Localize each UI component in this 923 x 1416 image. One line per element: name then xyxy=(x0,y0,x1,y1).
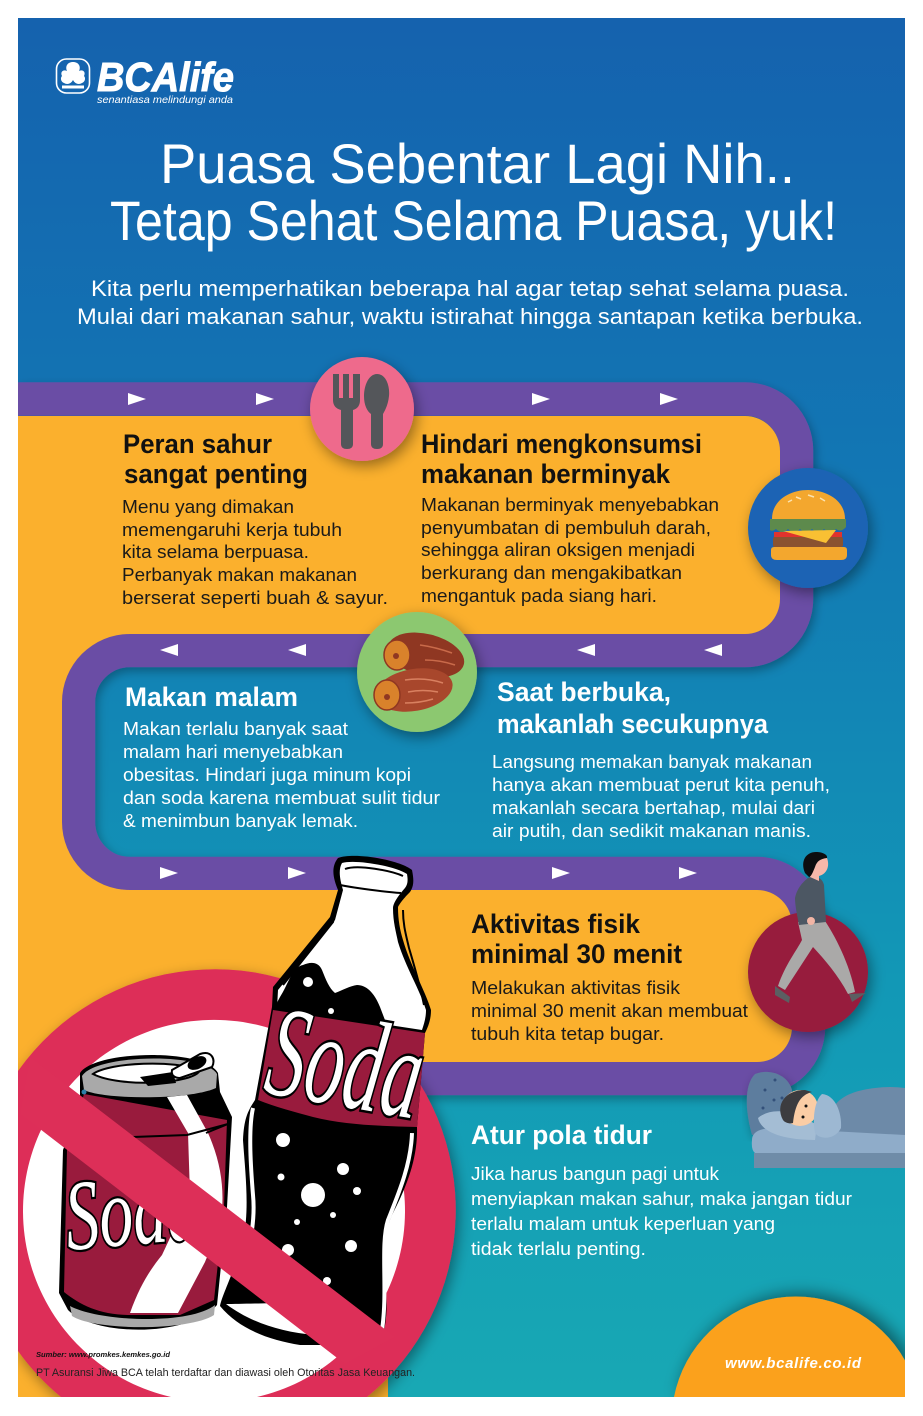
title: Tetap Sehat Selama Puasa, yuk! xyxy=(110,189,837,252)
text: peran sahur: sangat penting xyxy=(124,459,308,489)
text: saat berbuka: makanlah secukupnya xyxy=(497,709,769,739)
text: atur pola tidur: Atur pola tidur xyxy=(471,1120,652,1150)
winding path and panels xyxy=(18,399,808,1397)
logo emblem xyxy=(56,59,90,93)
text: aktivitas fisik: tubuh kita tetap bugar. xyxy=(471,1023,664,1044)
text: saat berbuka: air putih, dan sedikit makanan manis. xyxy=(492,820,811,841)
text: aktivitas fisik: Aktivitas fisik xyxy=(471,909,641,939)
can red body xyxy=(64,1094,227,1315)
text: makan malam xyxy=(123,682,440,831)
bottle bubbles xyxy=(276,977,361,1285)
soda can xyxy=(59,1053,232,1330)
logo tagline: senantiasa melindungi anda xyxy=(97,94,233,106)
icon: fork and spoon xyxy=(310,357,414,461)
bottle glass xyxy=(277,862,426,1030)
text: hindari makanan berminyak: Hindari mengkonsumsi xyxy=(421,429,702,459)
text: atur pola tidur xyxy=(471,1120,852,1259)
bottle label xyxy=(258,1010,425,1127)
text: saat berbuka: hanya akan membuat perut kita penuh, xyxy=(492,774,830,795)
text: hindari makanan berminyak xyxy=(421,429,719,606)
text: atur pola tidur: menyiapkan makan sahur, maka jangan tidur xyxy=(471,1188,852,1209)
bottle liquid xyxy=(277,962,385,1024)
text: peran sahur: Peran sahur xyxy=(123,429,272,459)
text: atur pola tidur: tidak terlalu penting. xyxy=(471,1238,646,1259)
text: aktivitas fisik: minimal 30 menit akan membuat xyxy=(471,1000,748,1021)
text: hindari makanan berminyak: berkurang dan mengakibatkan xyxy=(421,562,682,583)
text: makan malam: Makan malam xyxy=(125,682,298,712)
logo: BCA life xyxy=(56,54,234,106)
text: hindari makanan berminyak: mengantuk pada siang hari. xyxy=(421,585,657,606)
text: makan malam: Makan terlalu banyak saat xyxy=(123,718,348,739)
can lettering: Soda xyxy=(60,1150,204,1272)
title: Puasa Sebentar Lagi Nih.. xyxy=(160,132,795,195)
text: makan malam: & menimbun banyak lemak. xyxy=(123,810,358,831)
text: atur pola tidur: Jika harus bangun pagi untuk xyxy=(471,1163,720,1184)
legal note: PT Asuransi Jiwa BCA telah terdaftar dan diawasi oleh Otoritas Jasa Keuangan. xyxy=(36,1367,415,1379)
soda bottle xyxy=(220,856,435,1345)
text: saat berbuka: Langsung memakan banyak makanan xyxy=(492,751,812,772)
text: hindari makanan berminyak: makanan berminyak xyxy=(421,459,671,489)
ring interior xyxy=(23,1020,405,1397)
text: hindari makanan berminyak: Makanan berminyak menyebabkan xyxy=(421,494,719,515)
orange panel xyxy=(18,416,792,1397)
website badge xyxy=(674,1296,905,1397)
text: makan malam: dan soda karena membuat sulit tidur xyxy=(123,787,440,808)
text: aktivitas fisik xyxy=(471,909,748,1044)
icon: burger xyxy=(748,468,868,588)
text: peran sahur xyxy=(122,429,388,608)
text: saat berbuka: Saat berbuka, xyxy=(497,677,671,707)
intro text xyxy=(77,276,863,329)
intro text: Kita perlu memperhatikan beberapa hal agar tetap sehat selama puasa. xyxy=(91,276,849,301)
text: hindari makanan berminyak: penyumbatan di pembuluh darah, xyxy=(421,517,711,538)
icon: walking person xyxy=(748,852,868,1032)
text: peran sahur: memengaruhi kerja tubuh xyxy=(122,519,342,540)
text: aktivitas fisik: minimal 30 menit xyxy=(471,939,682,969)
text: peran sahur: kita selama berpuasa. xyxy=(122,541,309,562)
source note: Sumber: www.promkes.kemkes.go.id xyxy=(36,1350,170,1359)
text: peran sahur: berserat seperti buah & sayur. xyxy=(122,587,388,608)
text: hindari makanan berminyak: sehingga aliran oksigen menjadi xyxy=(421,539,695,560)
website badge: www.bcalife.co.id xyxy=(725,1355,862,1372)
purple road xyxy=(18,399,808,1078)
bottle base xyxy=(226,1303,306,1334)
icon: dates xyxy=(357,612,477,732)
intro text: Mulai dari makanan sahur, waktu istirahat hingga santapan ketika berbuka. xyxy=(77,304,863,329)
bottle edge highlights xyxy=(248,1108,256,1229)
icon: sleeping person in bed xyxy=(747,1072,905,1168)
text: saat berbuka xyxy=(492,677,830,841)
text: makan malam: obesitas. Hindari juga minum kopi xyxy=(123,764,411,785)
text: peran sahur: Menu yang dimakan xyxy=(122,496,294,517)
prohibition ring xyxy=(18,969,456,1397)
text: aktivitas fisik: Melakukan aktivitas fisik xyxy=(471,977,681,998)
can rim xyxy=(82,1058,217,1097)
text: peran sahur: Perbanyak makan makanan xyxy=(122,564,357,585)
text: atur pola tidur: terlalu malam untuk keperluan yang xyxy=(471,1213,775,1234)
can white swoosh xyxy=(130,1095,222,1313)
text: saat berbuka: makanlah secara bertahap, mulai dari xyxy=(492,797,815,818)
illustration: no soda sign xyxy=(18,856,456,1397)
text: makan malam: malam hari menyebabkan xyxy=(123,741,343,762)
logo wordmark: BCAlife xyxy=(97,54,234,100)
prohibition bar xyxy=(41,1086,384,1358)
title xyxy=(110,132,837,252)
bottle lettering: Soda xyxy=(257,979,435,1147)
road arrows xyxy=(128,393,722,879)
